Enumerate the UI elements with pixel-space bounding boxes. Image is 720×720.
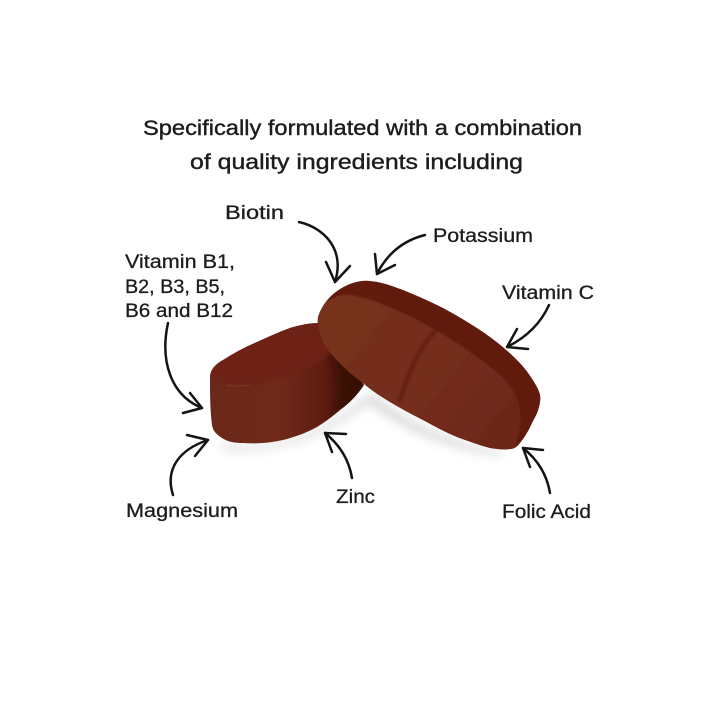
tablet shadows [222, 392, 505, 456]
label: Potassium: Potassium [433, 225, 533, 247]
title: Specifically formulated with a combination [143, 116, 582, 140]
arrow: Folic Acid [523, 448, 550, 493]
title: of quality ingredients including [190, 150, 523, 174]
arrow: Vitamin B group [165, 323, 202, 413]
label: Vitamin C: Vitamin C [502, 282, 594, 304]
score line [400, 331, 435, 400]
arrow: Magnesium [171, 435, 208, 495]
label: Vitamin B group [125, 251, 235, 322]
label: Zinc: Zinc [336, 486, 375, 508]
arrow: Vitamin C [507, 305, 549, 349]
tablets illustration [205, 281, 540, 460]
label: Vitamin B group: B6 and B12 [125, 300, 233, 322]
right tablet [310, 281, 540, 460]
arrow: Biotin [299, 222, 350, 282]
label: Magnesium: Magnesium [126, 500, 238, 522]
label: Vitamin B group: Vitamin B1, [125, 251, 235, 273]
label: Biotin: Biotin [225, 202, 284, 224]
arrow: Zinc [325, 433, 352, 478]
label: Vitamin B group: B2, B3, B5, [125, 276, 225, 298]
label: Folic Acid: Folic Acid [502, 501, 591, 523]
title [143, 116, 582, 174]
tablet face [310, 295, 520, 460]
left tablet [210, 323, 364, 444]
arrow: Potassium [375, 235, 425, 274]
